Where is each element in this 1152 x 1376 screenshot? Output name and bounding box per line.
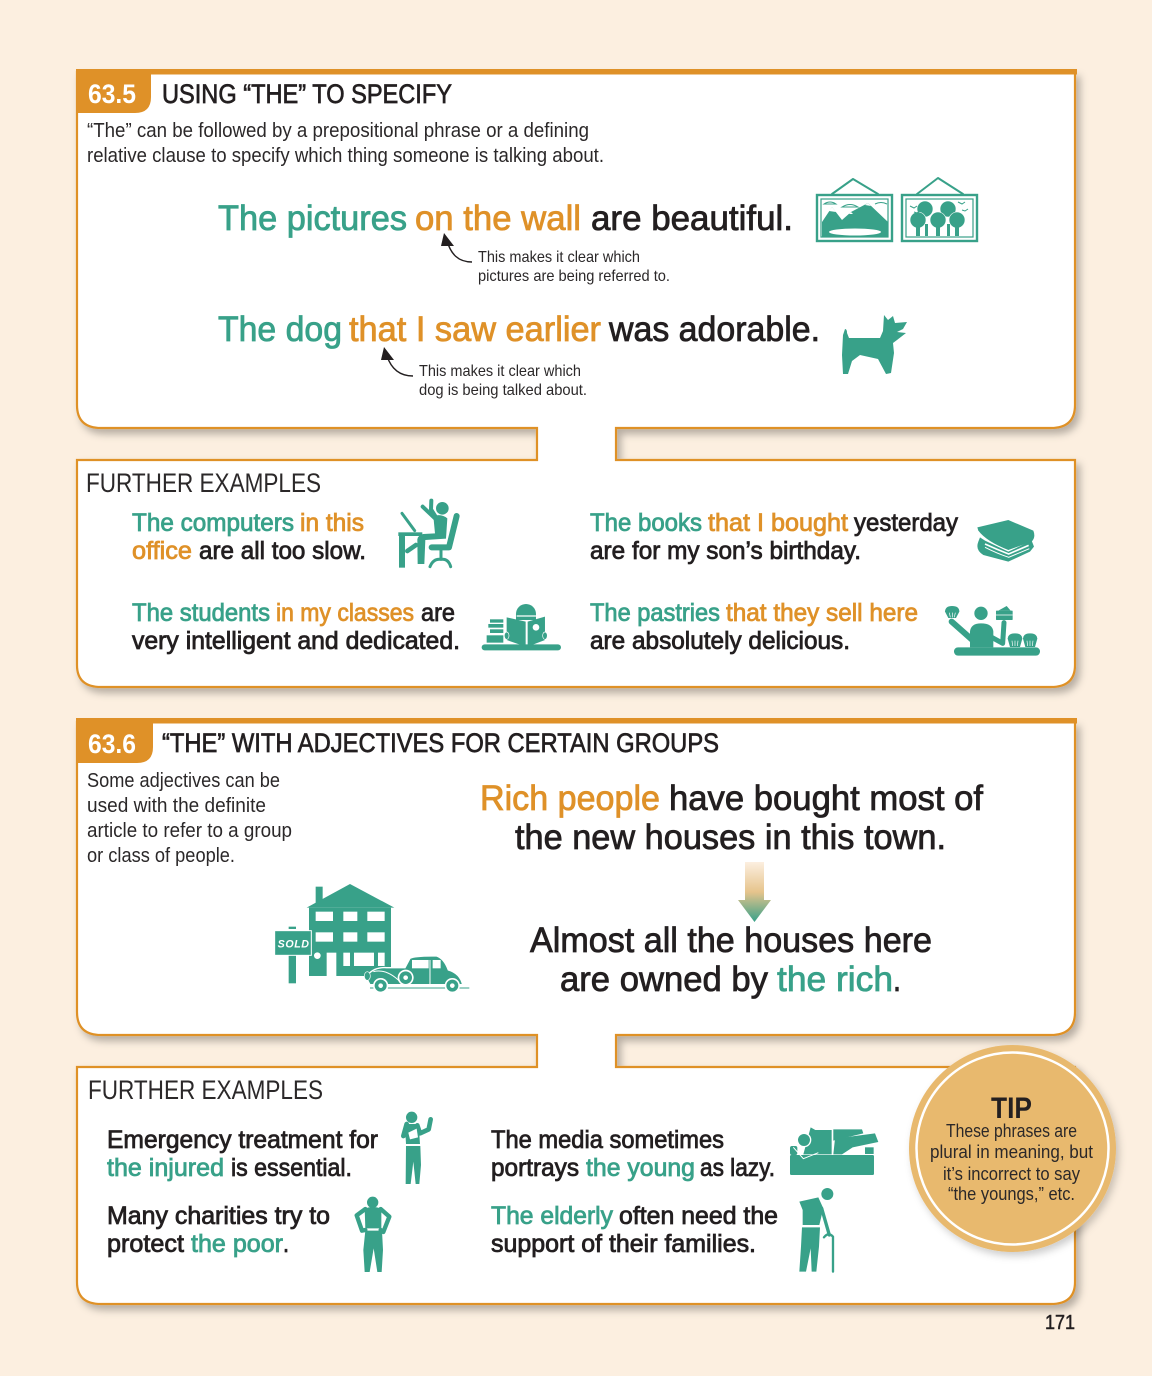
example: computers: in this (300, 509, 364, 537)
example: books (590, 509, 958, 565)
example: the elderly: support of their families. (491, 1230, 756, 1258)
further examples heading: FURTHER EXAMPLES (88, 1075, 323, 1105)
top bar (76, 718, 1077, 724)
example sentence: pictures: on the wall (415, 199, 581, 238)
page number: 171 (1045, 1312, 1075, 1334)
heading: USING “THE” TO SPECIFY (162, 79, 452, 109)
example: computers: office (132, 537, 192, 565)
note: dog (419, 363, 587, 399)
arrow: pictures note (441, 233, 472, 262)
example sentence: rich people (480, 779, 983, 857)
example: pastries: are absolutely delicious. (590, 627, 850, 655)
intro text: “The” can be followed by a prepositional phrase or a defining (87, 120, 589, 142)
intro text: or class of people. (87, 845, 235, 867)
intro text: Some adjectives can be (87, 770, 280, 792)
example: the poor (107, 1202, 330, 1258)
icon: injured person (403, 1112, 431, 1184)
example: the young: portrays (491, 1154, 579, 1182)
panel: section 63.6 the with adjectives (76, 718, 1077, 1304)
example: books: that I bought (708, 509, 848, 537)
example: the injured (107, 1126, 378, 1182)
panel outline with further examples box (77, 72, 1075, 687)
icon: elderly person with cane (799, 1188, 833, 1272)
example sentence: pictures: The pictures (218, 199, 407, 238)
example: pastries: that they sell here (726, 599, 918, 627)
example: the elderly: The elderly (491, 1202, 613, 1230)
example: computers (132, 509, 366, 565)
example: the poor: Many charities try to (107, 1202, 330, 1230)
example sentence: pictures: are beautiful. (591, 199, 793, 238)
example sentence: rich people: have bought most of (669, 779, 983, 818)
example sentence: rich people: the new houses in this town. (515, 818, 946, 857)
intro text: article to refer to a group (87, 820, 292, 842)
example: books: The books (590, 509, 702, 537)
example: the young (491, 1126, 775, 1182)
example: pastries (590, 599, 918, 655)
section number badge (76, 73, 151, 113)
icon: poor person (357, 1197, 389, 1272)
example: the elderly: often need the (619, 1202, 778, 1230)
example: the poor: . (283, 1230, 289, 1258)
panel: section 63.5 using the to specify (76, 69, 1077, 687)
intro text (87, 770, 292, 867)
example sentence: the rich (530, 921, 932, 999)
icon: person reading (482, 604, 561, 650)
icon: stack of books (977, 520, 1034, 562)
tip circle (909, 1045, 1116, 1252)
example sentence: dog: that I saw earlier (349, 310, 601, 349)
example: students: in my classes (276, 599, 414, 627)
example sentence: the rich: the rich (777, 960, 893, 999)
example: students: very intelligent and dedicated. (132, 627, 460, 655)
tip text: These phrases are (946, 1121, 1077, 1141)
section number badge: 63.5 (88, 79, 136, 109)
example sentence: the rich: Almost all the houses here (530, 921, 932, 960)
example sentence: rich people: Rich people (480, 779, 660, 818)
example: books: are for my son’s birthday. (590, 537, 861, 565)
tip callout (909, 1045, 1116, 1252)
example: pastries: The pastries (590, 599, 720, 627)
example: books: yesterday (854, 509, 958, 537)
example: students: are (421, 599, 455, 627)
tip text: it’s incorrect to say (943, 1164, 1080, 1184)
note: dog: dog is being talked about. (419, 382, 587, 399)
icon: framed pictures (817, 178, 977, 241)
arrow: gradient down (738, 862, 771, 922)
further examples heading: FURTHER EXAMPLES (86, 468, 321, 498)
example: the injured: is essential. (231, 1154, 352, 1182)
icon: person at computer (398, 501, 457, 568)
top bar (76, 69, 1077, 74)
example: students (132, 599, 460, 655)
tip text: plural in meaning, but (930, 1142, 1093, 1162)
note: pictures: pictures are being referred to. (478, 268, 670, 285)
example: the injured: Emergency treatment for (107, 1126, 378, 1154)
example sentence: the rich: . (893, 960, 901, 999)
example: the poor: protect (107, 1230, 184, 1258)
note: dog: This makes it clear which (419, 363, 581, 380)
example: the poor: the poor (191, 1230, 283, 1258)
example sentence: dog: The dog (218, 310, 342, 349)
icon: person lying on bed (790, 1127, 878, 1175)
section number badge: 63.6 (88, 729, 136, 759)
intro text: used with the definite (87, 795, 266, 817)
example: students: The students (132, 599, 270, 627)
tip text (930, 1121, 1093, 1204)
section number badge (76, 722, 153, 763)
example: the young: The media sometimes (491, 1126, 724, 1154)
tip heading: TIP (991, 1092, 1032, 1125)
note: pictures (478, 249, 670, 285)
tip text: “the youngs,” etc. (948, 1184, 1075, 1204)
example sentence: dog (218, 310, 820, 349)
example: the elderly (491, 1202, 778, 1258)
arrow: dog note (381, 347, 413, 376)
example sentence: pictures (218, 199, 793, 238)
example sentence: dog: was adorable. (608, 310, 820, 349)
panel outline with further examples box (77, 722, 1075, 1304)
example: the injured: the injured (107, 1154, 224, 1182)
icon: sold house and car (275, 884, 469, 993)
intro text: relative clause to specify which thing someone is talking about. (87, 145, 604, 167)
intro text (87, 120, 604, 167)
example sentence: the rich: are owned by (560, 960, 768, 999)
example: the young: the young (586, 1154, 695, 1182)
note: pictures: This makes it clear which (478, 249, 640, 266)
heading: “THE” WITH ADJECTIVES FOR CERTAIN GROUPS (162, 728, 719, 758)
example: computers: The computers (132, 509, 294, 537)
icon: dog (842, 315, 907, 374)
example: the young: as lazy. (700, 1154, 775, 1182)
icon: person with pastries (945, 606, 1040, 656)
example: computers: are all too slow. (199, 537, 366, 565)
icon: sold house and car: SOLD (278, 938, 309, 950)
